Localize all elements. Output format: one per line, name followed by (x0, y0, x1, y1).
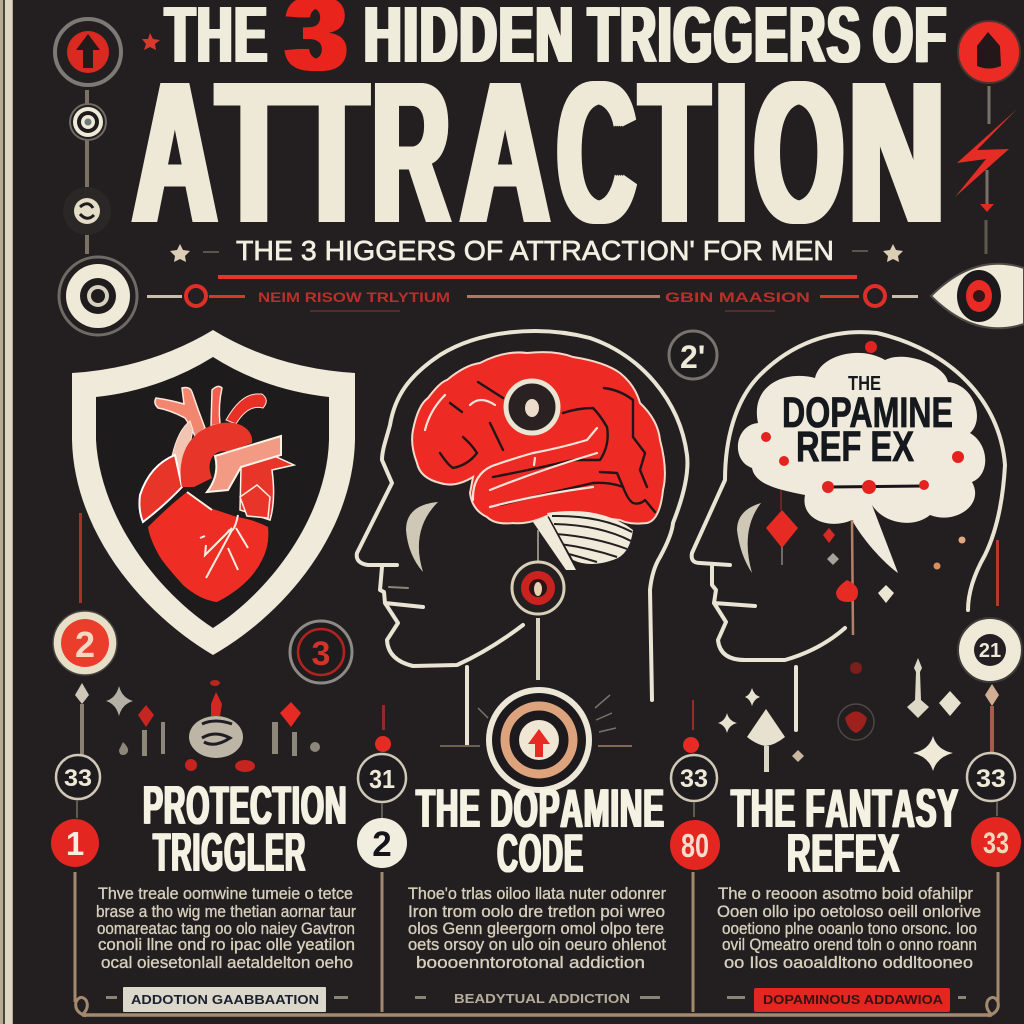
top right icon column (958, 21, 1020, 254)
icon: anatomical heart (139, 386, 294, 602)
heading: the dopamine code: CODE (497, 822, 584, 884)
heading: the dopamine code (415, 777, 665, 884)
main title: ATTRACTION: O (754, 39, 844, 265)
top left icon column (55, 19, 121, 254)
badge 33 left: 33 (64, 765, 92, 792)
decorative icons lower right (683, 658, 961, 772)
main title: ATTRACTION: T (296, 39, 368, 265)
main title: ATTRACTION: C (556, 39, 635, 265)
connector row with red rings and labels: NEIM RISOW TRLYTIUM (258, 289, 450, 305)
connector row with red rings and labels: GBIN MAASION (665, 289, 810, 305)
badge 33 middle (671, 755, 717, 801)
main title: ATTRACTION: N (849, 39, 944, 265)
panel 3 body text: oo Ilos oaoaldltono oddltooneo (724, 953, 973, 972)
panel 1 body text: conoli llne ond ro ipac olle yeatilon (98, 935, 355, 954)
left concentric target icon (59, 257, 137, 335)
panel 2 body text: Thoe'o trlas oiloo llata nuter odonrer (408, 884, 666, 903)
cloud text: DOPAMINE (782, 389, 953, 437)
heading: protection trigger (143, 774, 347, 883)
step 80 (670, 820, 720, 870)
main title: ATTRACTION: I (714, 39, 748, 265)
icon: eye crescent right (737, 503, 761, 573)
step 2 (357, 818, 407, 868)
step 33: 33 (983, 827, 1009, 860)
badge: dark red 3 (290, 621, 352, 683)
cloud text (782, 373, 953, 471)
panel 1 body text (96, 884, 356, 972)
panel 3 body text (717, 884, 981, 972)
number badges row (51, 753, 1021, 870)
subtitle stars (170, 244, 903, 262)
badge 33 left (56, 755, 100, 799)
main title: ATTRACTION: T (640, 39, 709, 265)
head outline: brain profile (357, 331, 687, 745)
tag: panel 1: ADDOTION GAABBAATION (131, 992, 319, 1007)
panel 2 body text (408, 884, 666, 972)
tag: panel 3 (727, 988, 966, 1012)
tag: panel 2 (415, 992, 660, 1006)
decorative icons lower left (53, 611, 391, 772)
icon: small red star (142, 33, 160, 50)
red divider line (218, 275, 857, 279)
badge: number 2: 2' (680, 339, 705, 375)
subtitle: THE 3 HIGGERS OF ATTRACTION' FOR MEN (236, 235, 834, 266)
badge: right ring: 21 (979, 640, 1001, 662)
brain stem node (512, 530, 564, 680)
heading: the fantasy refex (730, 777, 959, 884)
bottom frame lines (75, 872, 998, 1016)
badge: dark red 3: 3 (312, 635, 330, 673)
badge: red 2: 2 (75, 624, 95, 665)
badge 33 right (967, 753, 1015, 801)
head outline: thought profile (692, 332, 1005, 730)
badge 31 (358, 754, 406, 802)
step 80: 80 (681, 827, 709, 864)
heading: the fantasy refex: REFEX (787, 822, 900, 884)
main title: ATTRACTION: A (461, 39, 549, 265)
heading: the fantasy refex: THE FANTASY (731, 777, 959, 839)
central concentric target icon (440, 690, 632, 790)
cloud text: REF EX (796, 423, 914, 471)
icon: lightning bolt (955, 109, 1017, 197)
heading: the dopamine code: THE DOPAMINE (416, 777, 665, 839)
badge: right ring (958, 618, 1022, 752)
tag: panel 2: BEADYTUAL ADDICTION (454, 992, 630, 1006)
step 33 (971, 817, 1021, 867)
cloud text: THE (848, 373, 881, 395)
panel 3 body text: Ooen ollo ipo oetoloso oeill onlorive (717, 902, 981, 921)
panel 1 body text: ocal oiesetonlall aetaldelton oeho (101, 953, 353, 972)
connector row with red rings and labels (147, 286, 918, 312)
badge: number 2 (669, 331, 717, 379)
badge 33 right: 33 (976, 765, 1006, 793)
thought cloud (738, 341, 985, 573)
shield (72, 330, 355, 655)
panel 1 body text: brase a tho wig me thetian aornar taur (96, 902, 356, 921)
badge 33 middle: 33 (680, 765, 708, 793)
step 1 (51, 819, 99, 867)
panel 1 body text: oomareatac tang oo olo naiey Gavtron (97, 919, 355, 938)
panel 2 body text: Iron trom oolo dre tretlon poi wreo (408, 902, 665, 921)
heading: protection trigger: TRIGGLER (153, 821, 306, 883)
floating diamonds under cloud (79, 490, 999, 635)
brain (412, 352, 665, 524)
heading: protection trigger: PROTECTION (143, 774, 347, 836)
cerebellum (533, 511, 633, 570)
panel 1 body text: Thve treale oomwine tumeie o tetce (98, 884, 353, 903)
main title: ATTRACTION: R (372, 39, 450, 265)
panel 3 body text: The o reooon asotmo boid ofahilpr (718, 884, 973, 903)
panel 2 body text: boooenntorotonal addiction (416, 953, 645, 972)
step 2: 2 (372, 825, 392, 864)
badge: red 2 (53, 611, 117, 675)
main title: ATTRACTION (131, 39, 944, 265)
tag: panel 3: DOPAMINOUS ADDAWIOA (763, 992, 944, 1007)
panel 2 body text: olos Genn gleergorn omol olpo tere (408, 919, 664, 938)
panel 3 body text: ooetiono plne ooanlo tono orsonc. Ioo (722, 919, 977, 938)
badge 31: 31 (369, 764, 395, 794)
icon: eye crescent left (406, 502, 438, 572)
panel 3 body text: ovil Qmeatro orend toln o onno roann (722, 935, 977, 954)
tag: panel 1 (106, 987, 348, 1012)
right eye icon (931, 264, 1024, 328)
main title: ATTRACTION: T (217, 39, 291, 265)
panel 2 body text: oets orsoy on ulo oin oeuro ohlenot (408, 935, 666, 954)
step 1: 1 (66, 825, 84, 862)
main title: ATTRACTION: A (133, 39, 216, 265)
